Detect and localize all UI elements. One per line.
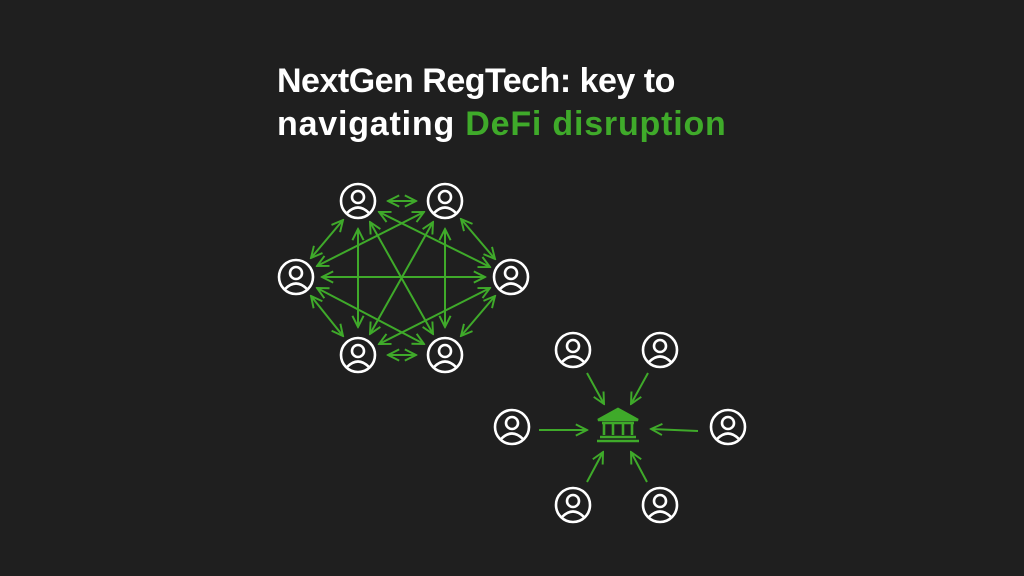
arrows: peer connections xyxy=(311,201,495,355)
title xyxy=(277,62,727,143)
icons: users around bank xyxy=(495,333,745,522)
arrows: users to bank xyxy=(539,373,698,482)
network: decentralized peer-to-peer xyxy=(279,184,528,372)
icons: users in network xyxy=(279,184,528,372)
network: centralized bank xyxy=(495,333,745,522)
title: NextGen RegTech: key to xyxy=(277,62,675,100)
title: navigating DeFi disruption xyxy=(277,105,727,143)
icon: bank xyxy=(597,409,639,441)
